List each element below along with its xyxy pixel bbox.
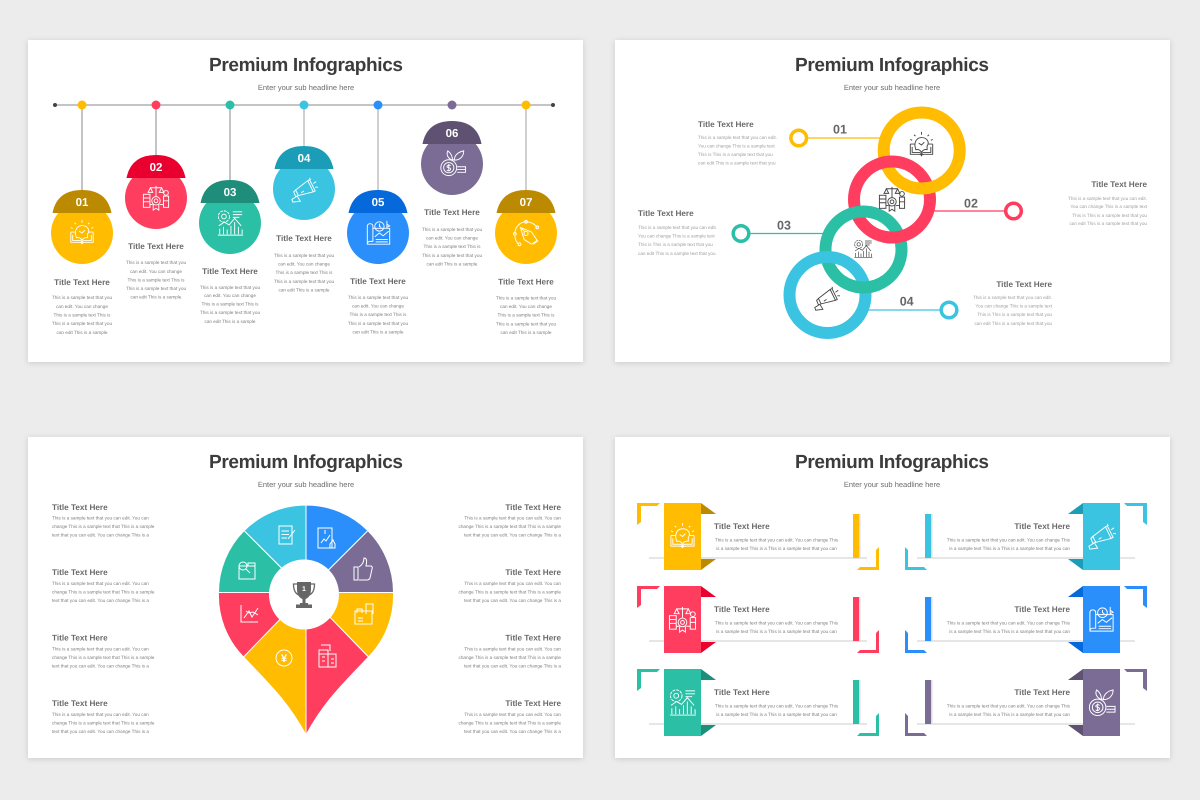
step 04: can edit. You can change (278, 262, 330, 266)
title: Premium Infographics (795, 452, 989, 473)
step 03: This is a sample text that you (200, 310, 260, 315)
step 05: can edit This is a sample (352, 330, 404, 334)
text block 04: This is a sample text that you can edit. (973, 295, 1052, 300)
ribbon card right 3: Title Text Here (1014, 688, 1070, 697)
step 07: 07 (520, 197, 532, 209)
text block 04: Title Text Here (996, 280, 1052, 289)
step 07: This is a sample text This is (498, 312, 555, 318)
left text 2: text that you can edit. You can change This is a (52, 598, 149, 603)
left text 4: This is a sample text that you can edit. You can (52, 712, 149, 717)
step 07: This is a sample text that you (496, 322, 556, 326)
step 06: This is a sample text This is (424, 244, 481, 249)
step 05 (347, 100, 409, 334)
connector 01: 01 (833, 122, 847, 136)
left text 2: Title Text Here (52, 568, 108, 577)
ribbon card left 3 (637, 669, 879, 736)
title: Premium Infographics (209, 452, 403, 473)
pin centre hub (269, 560, 339, 630)
ribbon card right 2: This is a sample text that you can edit. You can change This (947, 620, 1071, 626)
text block 03: This is a sample text that you can edit. (638, 225, 717, 230)
step 02: This is a sample text This is (128, 278, 185, 282)
ribbon card left 1: Title Text Here (714, 522, 770, 531)
ribbon card left 3: Title Text Here (714, 688, 770, 697)
segment icons (239, 526, 373, 667)
right text 2: Title Text Here (505, 568, 561, 577)
step 01: can edit This is a sample (56, 330, 108, 335)
text block 01: This is a sample text that you can edit. (698, 135, 777, 140)
panel: interlocking rings (615, 40, 1170, 362)
sub headline: Enter your sub headline here (258, 480, 354, 489)
step 01: This is a sample text This is (54, 312, 111, 318)
text block 02: This is This is a sample text that you (1072, 213, 1147, 218)
sub headline: Enter your sub headline here (844, 480, 940, 489)
right text 2: This is a sample text that you can edit. You can (464, 581, 561, 586)
pin chart (218, 505, 394, 735)
step 03: can edit. You can change (204, 293, 256, 298)
right text 2: text that you can edit. You can change This is a (464, 598, 561, 603)
text block 02: can edit This is a sample text that you (1069, 221, 1147, 226)
ribbon card right 2: is a sample text This is a This is a sample text that you can (949, 629, 1070, 634)
text block 01: This is This is a sample text that you (698, 152, 773, 157)
step 06: 06 (446, 128, 458, 140)
step 01: Title Text Here (54, 278, 110, 287)
text block 02: This is a sample text that you can edit. (1068, 196, 1147, 201)
step 04: This is a sample text that you (274, 253, 334, 258)
text block 04: You can change This is a sample text (975, 304, 1053, 308)
step 05: This is a sample text that you (348, 295, 408, 300)
step 03: This is a sample text This is (202, 302, 259, 306)
right text 3: text that you can edit. You can change This is a (464, 664, 561, 668)
step 02: Title Text Here (128, 242, 184, 251)
left text 3 (52, 634, 155, 668)
text block 03: You can change This is a sample text (638, 234, 715, 238)
connector 04: 04 (900, 294, 914, 308)
left text 1: text that you can edit. You can change This is a (52, 532, 149, 538)
left text 1 (52, 503, 155, 538)
step 02: This is a sample text that you (126, 260, 186, 265)
ribbon card left 2: This is a sample text that you can edit. You can change This (715, 620, 839, 626)
right text 4: Title Text Here (505, 699, 561, 708)
step 05: This is a sample text This is (350, 312, 407, 317)
step 04: This is a sample text This is (276, 270, 333, 275)
right text 3: Title Text Here (505, 634, 561, 642)
right text 4 (458, 699, 561, 734)
step 02: can edit. You can change (130, 269, 182, 274)
connector 04 (868, 294, 957, 318)
interlocked rings (790, 112, 960, 333)
ribbon card left 1 (637, 503, 879, 570)
icon: trophy: 1 (302, 586, 306, 593)
text block 01 (698, 120, 777, 166)
step 06: can edit. You can change (426, 236, 478, 240)
yen glyph: ¥ (281, 653, 288, 665)
text block 04: This is This is a sample text that you (977, 312, 1052, 317)
step 07: This is a sample text that you (496, 296, 556, 300)
left text 2 (52, 568, 155, 603)
panel: map pin segments (28, 437, 583, 758)
text block 03: This is This is a sample text that you (638, 242, 713, 247)
text block 03: can edit This is a sample text that you (638, 251, 716, 256)
step 04: This is a sample text that you (274, 279, 334, 284)
left text 3: This is a sample text that you can edit. You can (52, 646, 149, 652)
left text 2: change This is a sample text that This is a sample (52, 590, 155, 594)
ribbon card left 2: is a sample text This is a This is a sample text that you can (716, 629, 837, 634)
step 04 (273, 100, 335, 292)
left text 4: change This is a sample text that This is a sample (52, 720, 155, 726)
right text 1: Title Text Here (505, 503, 561, 512)
step 06: Title Text Here (424, 208, 480, 217)
step 06: This is a sample text that you (422, 253, 482, 258)
left text 1: change This is a sample text that This is a sample (52, 524, 155, 529)
step 02: This is a sample text that you (126, 286, 186, 291)
left text 4: Title Text Here (52, 699, 108, 708)
step 05: can edit. You can change (352, 304, 404, 308)
step 04: can edit This is a sample (278, 288, 330, 292)
step 06 (421, 100, 483, 266)
step 01 (51, 100, 113, 335)
step 05: This is a sample text that you (348, 321, 408, 326)
text block 02 (1068, 180, 1148, 226)
step 07: Title Text Here (498, 278, 554, 286)
left text 3: Title Text Here (52, 634, 108, 642)
step 03 (199, 100, 261, 324)
step 03: This is a sample text that you (200, 285, 260, 290)
text block 03 (638, 209, 717, 256)
left text 2: This is a sample text that you can edit. You can (52, 581, 149, 586)
connector 02 (933, 196, 1021, 219)
step 04: 04 (298, 153, 311, 165)
text block 03: Title Text Here (638, 209, 694, 218)
connector 02: 02 (964, 196, 978, 210)
step 05: 05 (372, 197, 385, 209)
left text 3: change This is a sample text that This is a sample (52, 655, 155, 660)
left text 4: text that you can edit. You can change This is a (52, 729, 149, 734)
right text 2: change This is a sample text that This is a sample (458, 590, 561, 594)
right text 2 (458, 568, 561, 603)
right text 3 (458, 634, 561, 668)
timeline axis (53, 103, 555, 107)
step 07: can edit. You can change (500, 304, 552, 309)
ribbon card right 2: Title Text Here (1014, 605, 1070, 614)
text block 02: You can change This is a sample text (1070, 204, 1148, 209)
step 04: Title Text Here (276, 234, 332, 243)
step 07: can edit This is a sample (500, 330, 552, 335)
right text 1: This is a sample text that you can edit. You can (464, 516, 561, 520)
right text 4: text that you can edit. You can change This is a (464, 729, 561, 734)
step 02 (125, 100, 187, 300)
step 06: This is a sample text that you (422, 227, 482, 232)
step 01: This is a sample text that you (52, 321, 112, 326)
panel: hanging circles timeline (28, 40, 583, 362)
right text 3: change This is a sample text that This is a sample (458, 655, 561, 660)
step 03: can edit This is a sample (204, 319, 256, 324)
step 03: 03 (224, 187, 236, 199)
right text 1: change This is a sample text that This is a sample (458, 524, 561, 529)
sub headline: Enter your sub headline here (258, 83, 354, 92)
connector 03: 03 (777, 218, 791, 232)
ribbon card right 1: is a sample text This is a This is a sample text that you can (949, 546, 1070, 551)
ribbon card right 3 (905, 669, 1147, 736)
step 01: This is a sample text that you (52, 295, 112, 300)
ribbon card left 3: is a sample text This is a This is a sample text that you can (716, 712, 837, 717)
right text 4: This is a sample text that you can edit. You can (464, 712, 561, 717)
ribbon card left 1: is a sample text This is a This is a sample text that you can (716, 546, 837, 551)
right text 1 (458, 503, 561, 538)
left text 3: text that you can edit. You can change This is a (52, 664, 149, 668)
step 01: can edit. You can change (56, 304, 108, 309)
text block 02: Title Text Here (1091, 180, 1147, 189)
left text 1: This is a sample text that you can edit. You can (52, 516, 149, 520)
step 01: 01 (76, 197, 89, 209)
ribbon card right 1: Title Text Here (1014, 522, 1070, 531)
ring icons (815, 132, 933, 310)
connector 01 (791, 122, 882, 146)
ribbon card right 1: This is a sample text that you can edit. You can change This (947, 538, 1071, 542)
connector 03 (733, 218, 824, 241)
right text 3: This is a sample text that you can edit. You can (464, 646, 561, 652)
step 03: Title Text Here (202, 267, 258, 276)
title: Premium Infographics (795, 55, 989, 76)
text block 01: Title Text Here (698, 120, 754, 129)
ribbon card right 2 (905, 586, 1147, 653)
step 02: can edit This is a sample (130, 294, 182, 300)
left text 4 (52, 699, 155, 734)
right text 1: text that you can edit. You can change This is a (464, 532, 561, 538)
icon: trophy (294, 582, 314, 608)
text block 01: can edit This is a sample text that you (698, 160, 776, 166)
ribbon card left 2: Title Text Here (714, 605, 770, 614)
ribbon card right 3: This is a sample text that you can edit. You can change This (947, 704, 1071, 708)
ribbon card right 1 (905, 503, 1147, 570)
title: Premium Infographics (209, 55, 403, 76)
panel: ribbon cards (615, 437, 1170, 758)
text block 01: You can change This is a sample text (698, 144, 775, 148)
ribbon card left 1: This is a sample text that you can edit. You can change This (715, 538, 839, 542)
text block 04 (973, 280, 1053, 326)
sub headline: Enter your sub headline here (844, 83, 940, 92)
ribbon card left 2 (637, 586, 879, 653)
step 07 (495, 100, 557, 335)
ribbon card right 3: is a sample text This is a This is a sample text that you can (949, 712, 1070, 717)
ribbon card left 3: This is a sample text that you can edit. You can change This (715, 704, 839, 708)
step 05: Title Text Here (350, 277, 406, 286)
text block 04: can edit This is a sample text that you (974, 321, 1052, 326)
right text 4: change This is a sample text that This is a sample (458, 720, 561, 726)
left text 1: Title Text Here (52, 503, 108, 512)
step 06: can edit This is a sample (426, 262, 478, 266)
step 02: 02 (150, 162, 162, 174)
